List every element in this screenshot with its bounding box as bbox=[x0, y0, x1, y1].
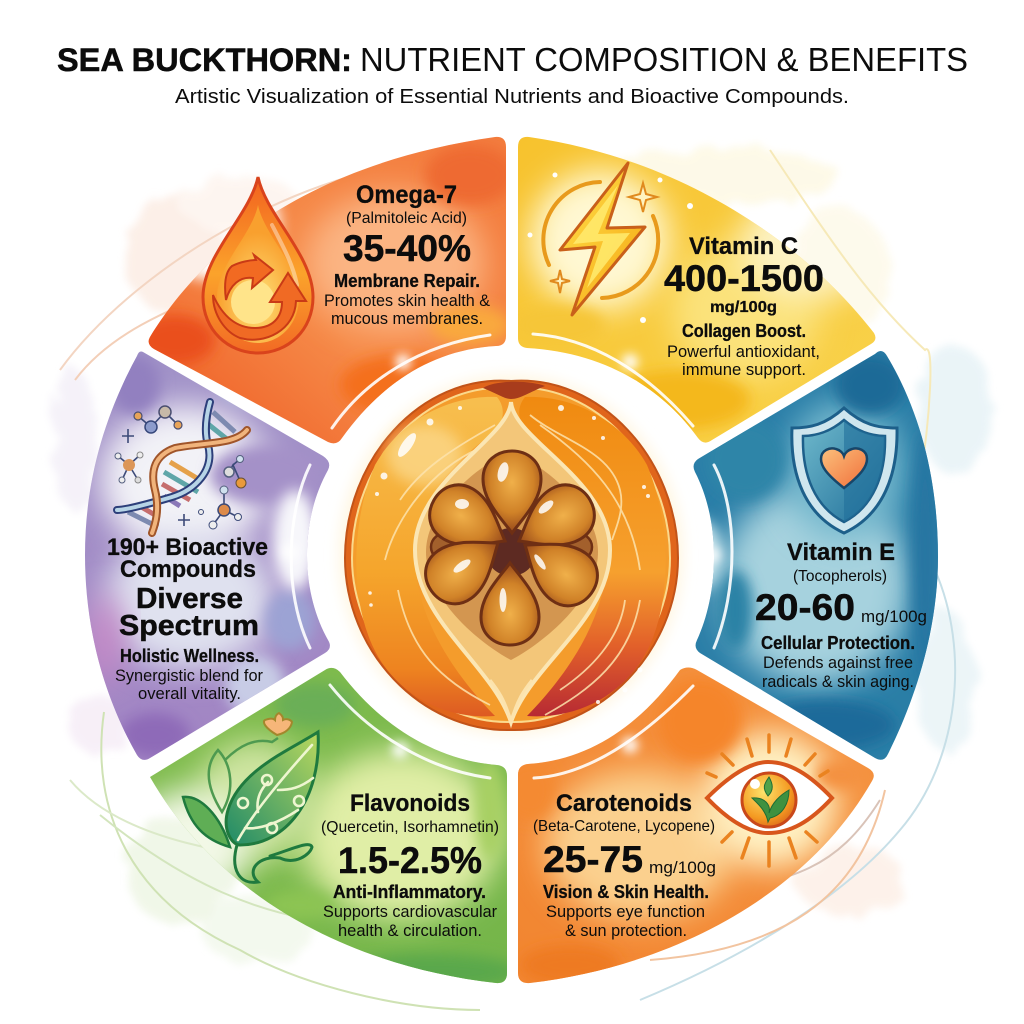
panel: bioactive compounds bbox=[80, 345, 340, 765]
flesh fibres bbox=[385, 415, 640, 715]
bioactive text: Spectrum bbox=[119, 610, 259, 642]
small back seeds bbox=[431, 532, 592, 562]
fruit glow bbox=[339, 375, 683, 735]
decorative orbit lines bbox=[60, 150, 955, 1010]
vitamin e text: 20-60 bbox=[755, 587, 855, 628]
seed sac bbox=[415, 402, 610, 722]
vitamin e text: Vitamin E bbox=[787, 539, 895, 566]
flavonoids text: Supports cardiovascular bbox=[323, 902, 497, 921]
panel: vitamin c bbox=[510, 130, 880, 450]
vitamin c text: immune support. bbox=[682, 360, 806, 379]
bioactive text: Diverse bbox=[136, 583, 243, 615]
omega-7 text: Membrane Repair. bbox=[334, 271, 480, 291]
title: NUTRIENT COMPOSITION & BENEFITS bbox=[360, 41, 968, 78]
bioactive text: Compounds bbox=[120, 556, 256, 583]
vitamin c inner arc highlight bbox=[533, 334, 693, 426]
seed core bbox=[486, 528, 536, 576]
vitamin c watercolor segment bbox=[510, 130, 880, 450]
fruit rim bbox=[352, 388, 670, 722]
flavonoids text: 1.5-2.5% bbox=[338, 840, 482, 881]
flavonoids inner arc highlight bbox=[330, 685, 490, 778]
bottom cleft bbox=[490, 680, 532, 722]
title: SEA BUCKTHORN: bbox=[57, 42, 352, 78]
seeds bbox=[415, 451, 608, 645]
carotenoids text: Vision & Skin Health. bbox=[543, 882, 709, 902]
vitamin e inner arc highlight bbox=[714, 465, 732, 648]
omega-7 text: (Palmitoleic Acid) bbox=[346, 210, 467, 227]
vitamin e text: (Tocopherols) bbox=[793, 568, 887, 585]
vitamin e text: Cellular Protection. bbox=[761, 633, 915, 653]
vitamin c text: mg/100g bbox=[710, 299, 777, 316]
bioactive text: Holistic Wellness. bbox=[120, 646, 259, 666]
carotenoids text: Supports eye function bbox=[546, 902, 705, 921]
bioactive watercolor segment bbox=[80, 345, 340, 765]
omega-7 text: 35-40% bbox=[343, 228, 471, 269]
panel: carotenoids bbox=[518, 668, 874, 984]
flavonoids text: Flavonoids bbox=[350, 790, 470, 817]
flavonoids text bbox=[321, 790, 499, 940]
bioactive text bbox=[107, 534, 268, 703]
omega-7 text bbox=[324, 181, 491, 328]
background watercolor washes bbox=[53, 147, 993, 962]
vitamin c text: Powerful antioxidant, bbox=[667, 342, 820, 361]
bioactive inner arc highlight bbox=[291, 465, 310, 648]
icon: shield with heart bbox=[792, 408, 897, 533]
flavonoids watercolor segment bbox=[150, 668, 507, 984]
icon: leaf with sprig bbox=[183, 713, 318, 882]
carotenoids text: Carotenoids bbox=[556, 790, 692, 817]
vitamin c text: 400-1500 bbox=[664, 258, 824, 299]
vitamin e text: mg/100g bbox=[861, 607, 927, 626]
carotenoids watercolor segment bbox=[518, 668, 874, 984]
carotenoids text bbox=[533, 790, 716, 940]
seed highlights bbox=[452, 461, 555, 612]
panel: omega-7 bbox=[135, 130, 515, 450]
subtitle: Artistic Visualization of Essential Nutrients and Bioactive Compounds. bbox=[175, 86, 849, 108]
flavonoids text: Anti-Inflammatory. bbox=[333, 882, 486, 902]
carotenoids text: (Beta-Carotene, Lycopene) bbox=[533, 818, 715, 835]
fruit flesh left bbox=[356, 397, 503, 716]
vitamin e text: radicals & skin aging. bbox=[762, 672, 914, 691]
omega-7 inner arc highlight bbox=[332, 335, 490, 428]
bioactive text: Synergistic blend for bbox=[115, 666, 263, 685]
vitamin c text: Collagen Boost. bbox=[682, 321, 806, 341]
vitamin e watercolor segment bbox=[694, 351, 938, 760]
glow highlights bbox=[282, 354, 720, 758]
fruit flesh right bbox=[519, 397, 666, 716]
central fruit illustration bbox=[339, 375, 683, 735]
flesh highlights bbox=[368, 405, 650, 704]
vitamin c text bbox=[664, 233, 824, 379]
vitamin e text: Defends against free bbox=[763, 653, 913, 672]
carotenoids inner arc highlight bbox=[534, 686, 693, 778]
carotenoids text: & sun protection. bbox=[565, 921, 687, 940]
top dimple bbox=[483, 382, 545, 399]
omega-7 text: Omega-7 bbox=[356, 181, 457, 209]
omega-7 text: Promotes skin health & bbox=[324, 291, 491, 310]
carotenoids text: 25-75 bbox=[543, 839, 643, 880]
carotenoids text: mg/100g bbox=[649, 858, 716, 877]
pale flesh patch bbox=[387, 425, 463, 485]
flavonoids text: (Quercetin, Isorhamnetin) bbox=[321, 819, 499, 836]
omega-7 text: mucous membranes. bbox=[331, 309, 483, 328]
seed cavity bbox=[426, 450, 598, 660]
icon: oil drop with arrows bbox=[203, 177, 313, 353]
omega-7 watercolor segment bbox=[135, 130, 515, 450]
icon: lightning bolt bbox=[528, 163, 693, 323]
vitamin c text: Vitamin C bbox=[689, 233, 798, 260]
vitamin e text bbox=[755, 539, 927, 691]
flavonoids text: health & circulation. bbox=[338, 921, 482, 940]
icon: dna helix and molecules bbox=[115, 402, 247, 533]
title bbox=[57, 41, 968, 78]
panel: flavonoids bbox=[150, 668, 507, 984]
panel: vitamin e bbox=[694, 351, 938, 760]
bioactive text: overall vitality. bbox=[138, 684, 241, 703]
bioactive text: 190+ Bioactive bbox=[107, 534, 268, 561]
icon: eye with sprout bbox=[707, 735, 832, 866]
fruit skin bbox=[345, 381, 678, 730]
